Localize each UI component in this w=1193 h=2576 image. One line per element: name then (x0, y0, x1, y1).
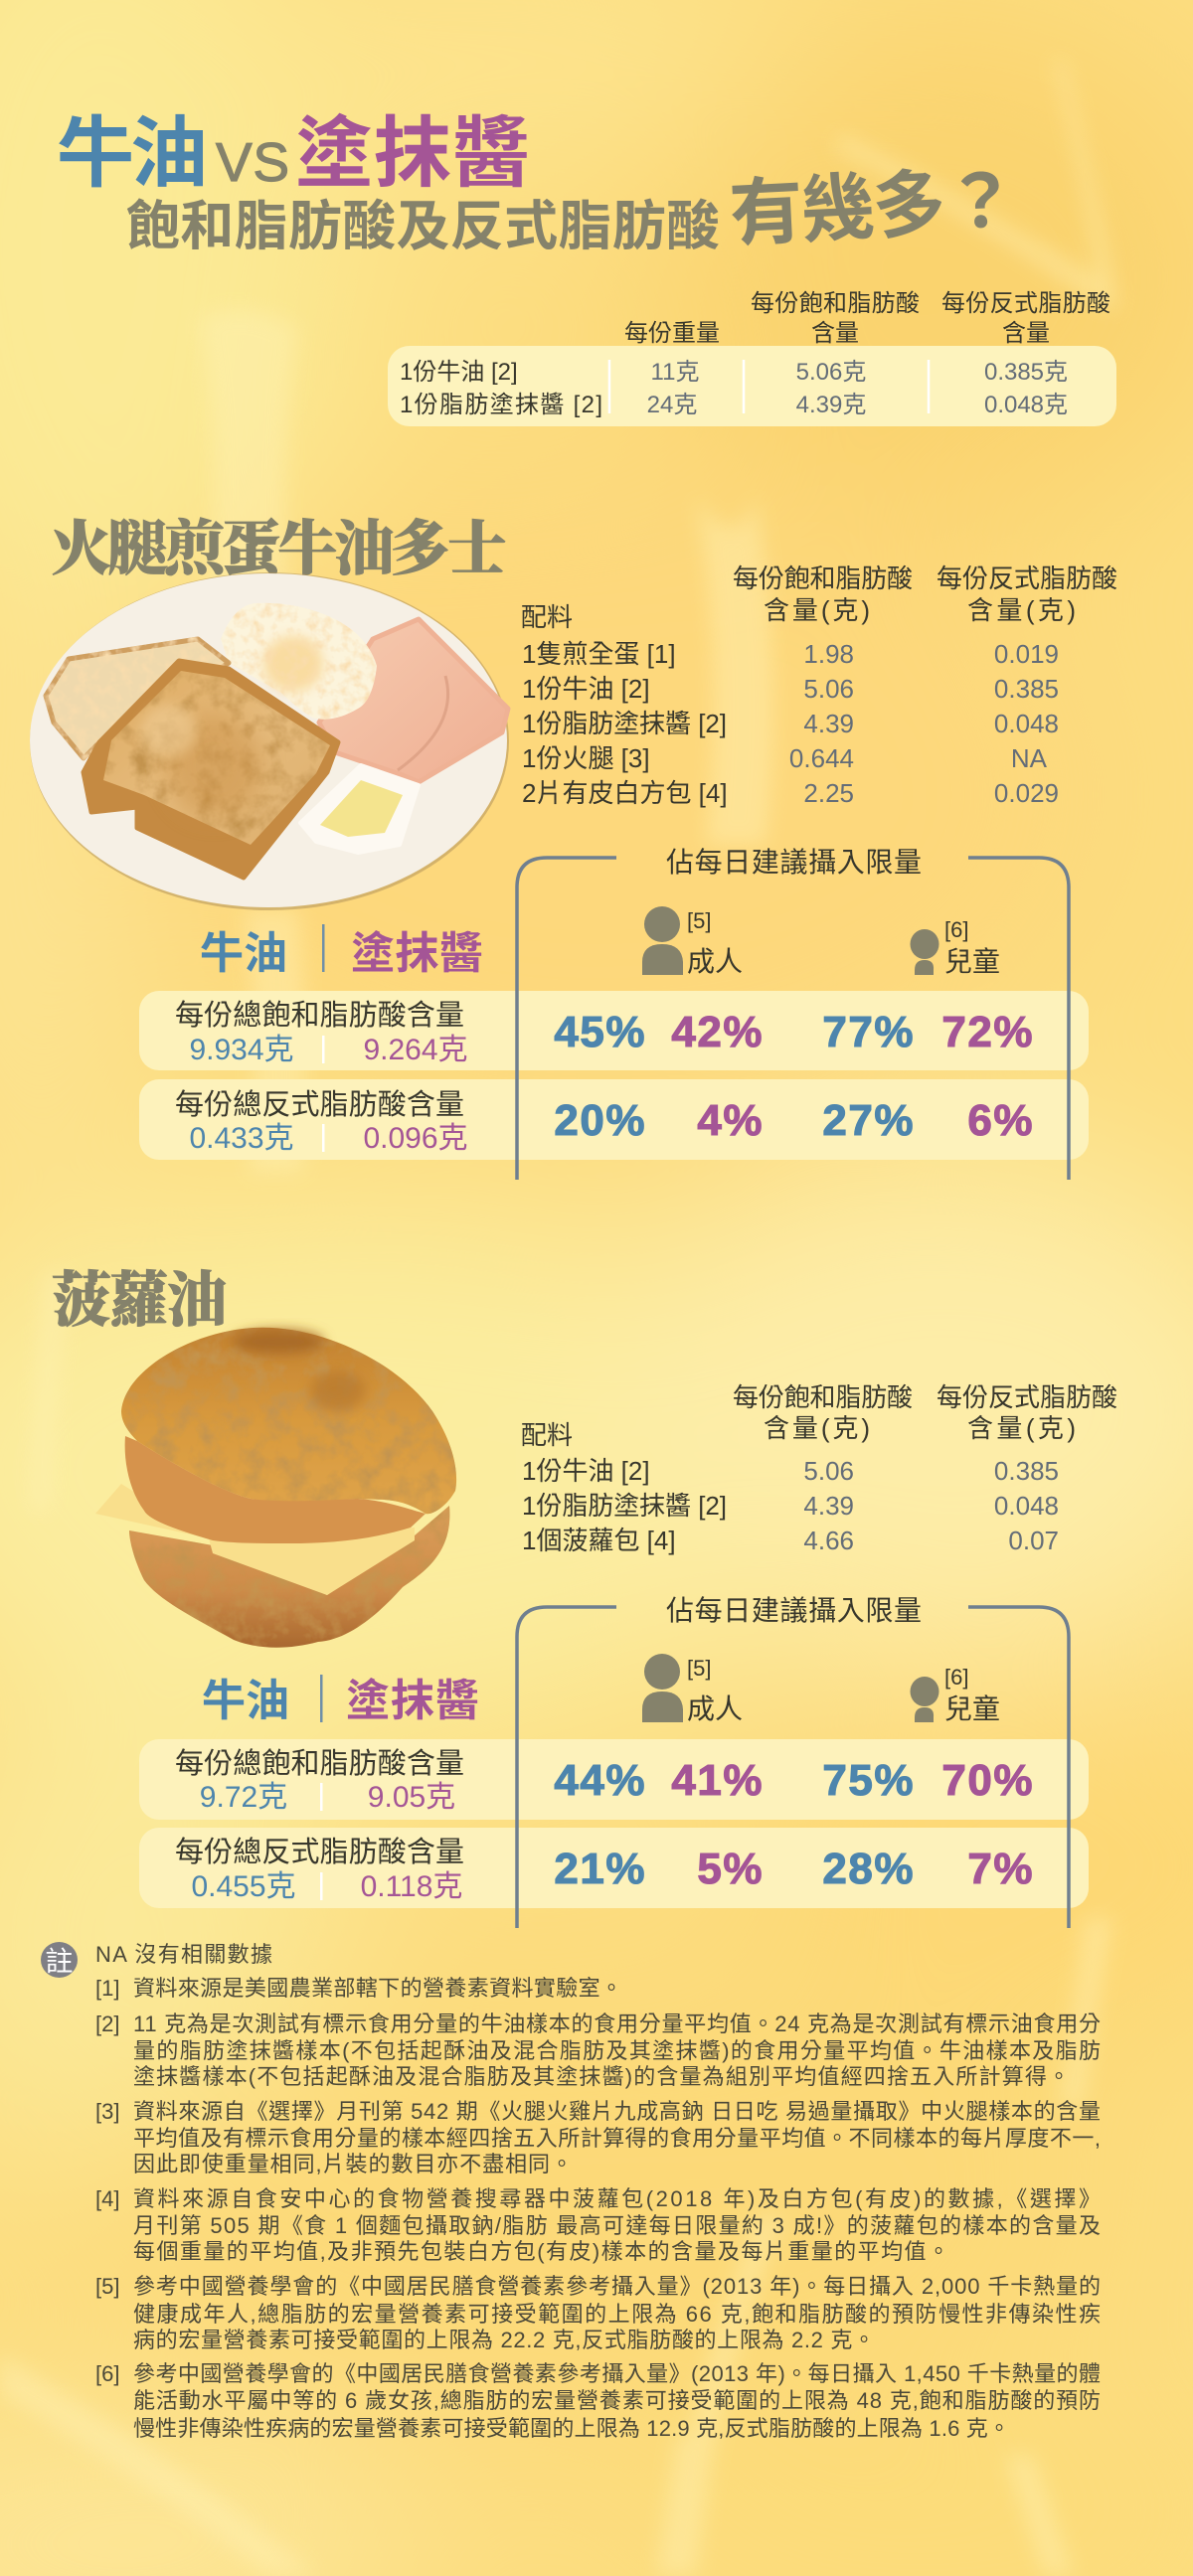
heading: ham and egg toast: 火腿煎蛋牛油多士 (52, 517, 507, 582)
title: VS (216, 131, 289, 193)
row: total saturated fat, toast: 42% (671, 1008, 764, 1056)
table: ingredients for ham and egg toast: 0.029 (994, 778, 1059, 808)
row: total saturated fat, toast: 9.934克 (189, 1034, 294, 1066)
notes: NA 沒有相關數據 (95, 1942, 272, 1967)
notes: 能活動水平屬中等的 6 歲女孩,總脂肪的宏量營養素可接受範圍的上限為 48 克,飽和脂肪酸的預防 (133, 2388, 1101, 2413)
table: ingredients for ham and egg toast: 含量(克) (967, 595, 1076, 625)
ham (319, 619, 508, 782)
row: total saturated fat, toast: 72% (941, 1008, 1034, 1056)
row: total saturated fat, toast: 9.264克 (363, 1034, 468, 1066)
table: ingredients for ham and egg toast: 1份牛油 [2] (522, 674, 650, 704)
icon: adult (642, 906, 743, 977)
notes: 資料來源自食安中心的食物營養搜尋器中菠蘿包(2018 年)及白方包(有皮)的數據,《選擇》 (133, 2186, 1101, 2211)
table: ingredients for ham and egg toast: 1份脂肪塗抹醬 [2] (522, 709, 727, 738)
notes: 塗抹醬樣本(不包括起酥油及混合脂肪及其塗抹醬)的含量為組別平均值經四捨五入所計算得。 (133, 2064, 1070, 2089)
table: serving weight and fat per serving: 每份反式脂肪酸 (941, 290, 1110, 317)
notes: 月刊第 505 期《食 1 個麵包攝取鈉/脂肪 最高可達每日限量約 3 成!》的菠蘿包的樣本的含量及 (133, 2213, 1101, 2238)
bracket: share of daily recommended intake: 佔每日建議攝入限量 (666, 1595, 922, 1626)
row: total saturated fat, bun: 44% (554, 1756, 646, 1805)
row: total trans fat, bun: 21% (554, 1845, 646, 1893)
icon: adult (642, 1654, 743, 1724)
table: ingredients for pineapple bun: 每份反式脂肪酸 (937, 1382, 1117, 1412)
notes (95, 1942, 1101, 2441)
table: ingredients for ham and egg toast: 2片有皮白方包 [4] (522, 778, 728, 808)
table: ingredients for pineapple bun: 配料 (521, 1420, 573, 1450)
bracket: share of daily recommended intake (517, 847, 1069, 1180)
row: total trans fat, bun: 0.118克 (361, 1870, 462, 1903)
table: ingredients for pineapple bun: 含量(克) (764, 1413, 870, 1443)
table: ingredients for pineapple bun: 1份脂肪塗抹醬 [2] (522, 1491, 727, 1521)
notes: 平均值及有標示食用分量的樣本經四捨五入所計算得的食用分量平均值。不同樣本的每片厚度不一, (133, 2126, 1101, 2151)
table: ingredients for pineapple bun: 1份牛油 [2] (522, 1456, 650, 1486)
food photo: pineapple bun (95, 1328, 456, 1648)
table: ingredients for pineapple bun: 4.39 (803, 1491, 854, 1521)
title: 飽和脂肪酸及反式脂肪酸 (126, 197, 720, 256)
notes: 資料來源是美國農業部轄下的營養素資料實驗室。 (133, 1976, 622, 2001)
table: ingredients for ham and egg toast: 1份火腿 [3] (522, 743, 650, 773)
butter dish (300, 765, 419, 853)
table: serving weight and fat per serving: 含量 (811, 320, 859, 347)
notes: [4] (95, 2186, 119, 2211)
table: ingredients for ham and egg toast: 0.019 (994, 639, 1059, 669)
notes: [1] (95, 1976, 119, 2001)
heading: pineapple bun with butter: 菠蘿油 (52, 1268, 227, 1334)
table: serving weight and fat per serving: 4.39克 (796, 392, 866, 418)
row: total trans fat, bun: 每份總反式脂肪酸含量 (175, 1836, 464, 1868)
table: ingredients for ham and egg toast: 每份反式脂肪酸 (937, 564, 1117, 593)
row: total saturated fat, toast: 每份總飽和脂肪酸含量 (175, 999, 464, 1032)
notes: 每個重量的平均值,及非預先包裝白方包(有皮)樣本的含量及每片重量的平均值。 (133, 2239, 949, 2264)
table: serving weight and fat per serving: 24克 (647, 392, 697, 418)
row: total trans fat, toast: 4% (697, 1096, 764, 1145)
title: 塗抹醬 (295, 109, 530, 197)
legend: butter vs spread: 塗抹醬 (346, 1677, 479, 1725)
table: ingredients for ham and egg toast: 5.06 (803, 674, 854, 704)
row: total trans fat, bun (175, 1836, 1034, 1903)
row: total trans fat, bun: 7% (967, 1845, 1034, 1893)
icon: child: 兒童 (944, 946, 1000, 977)
legend: butter vs spread (202, 1675, 479, 1725)
row: total trans fat, toast: 20% (554, 1096, 646, 1145)
notes: [5] (95, 2274, 119, 2299)
icon: child: 兒童 (944, 1693, 1000, 1724)
back toast (46, 639, 229, 758)
table: ingredients for pineapple bun: 0.048 (994, 1491, 1059, 1521)
row: total saturated fat, bun: 9.72克 (200, 1781, 287, 1814)
panel: comparison rows for toast (139, 991, 1089, 1160)
notes: 參考中國營養學會的《中國居民膳食營養素參考攝入量》(2013 年)。每日攝入 2,000 千卡熱量的 (133, 2274, 1101, 2299)
bracket: share of daily recommended intake: 佔每日建議攝入限量 (666, 847, 922, 878)
icon: child (911, 917, 1000, 977)
row: total trans fat, toast (175, 1088, 1034, 1155)
table: serving weight and fat per serving: 每份重量 (624, 320, 720, 347)
bracket: share of daily recommended intake (517, 1595, 1069, 1928)
icon: child: [6] (944, 917, 968, 942)
middle bread (125, 1436, 426, 1543)
icon: adult: [5] (687, 1656, 711, 1681)
table: ingredients for ham and egg toast: 1隻煎全蛋 [1] (522, 639, 676, 669)
legend: butter vs spread: 塗抹醬 (351, 929, 483, 978)
table: serving weight and fat per serving: 11克 (651, 359, 699, 386)
table: ingredients for pineapple bun: 0.385 (994, 1456, 1059, 1486)
notes: 參考中國營養學會的《中國居民膳食營養素參考攝入量》(2013 年)。每日攝入 1,450 千卡熱量的體 (133, 2361, 1101, 2386)
row: total trans fat, toast: 0.433克 (189, 1122, 294, 1155)
table: ingredients for ham and egg toast: 含量(克) (764, 595, 870, 625)
row: total trans fat, toast: 6% (967, 1096, 1034, 1145)
table: ingredients for ham and egg toast: 0.644 (789, 743, 854, 773)
table: ingredients for ham and egg toast (521, 564, 1117, 808)
notes: 資料來源自《選擇》月刊第 542 期《火腿火雞片九成高鈉 日日吃 易過量攝取》中火腿樣本的含量 (133, 2099, 1101, 2124)
front toast (84, 661, 338, 878)
table: serving weight and fat per serving: 0.385克 (984, 359, 1068, 386)
table: serving weight and fat per serving: 0.048克 (984, 392, 1068, 418)
food photo: plate with toast, egg, ham and butter (30, 572, 509, 910)
table: ingredients for pineapple bun: 4.66 (803, 1526, 854, 1555)
table: ingredients for pineapple bun: 1個菠蘿包 [4] (522, 1526, 676, 1555)
icon: child: [6] (944, 1665, 968, 1690)
table: ingredients for ham and egg toast: 0.048 (994, 709, 1059, 738)
row: total trans fat, bun: 5% (697, 1845, 764, 1893)
table: ingredients for pineapple bun: 5.06 (803, 1456, 854, 1486)
row: total trans fat, bun: 28% (822, 1845, 915, 1893)
notes: 量的脂肪塗抹醬樣本(不包括起酥油及混合脂肪及其塗抹醬)的食用分量平均值。牛油樣本及脂肪 (133, 2038, 1101, 2063)
table: ingredients for pineapple bun: 每份飽和脂肪酸 (733, 1382, 913, 1412)
table: serving weight and fat per serving (388, 290, 1116, 426)
table: ingredients for ham and egg toast: 每份飽和脂肪酸 (733, 564, 913, 593)
row: total saturated fat, bun: 70% (941, 1756, 1034, 1805)
row: total saturated fat, bun: 75% (822, 1756, 915, 1805)
row: total saturated fat, toast (175, 999, 1034, 1066)
notes: 因此即使重量相同,片裝的數目亦不盡相同。 (133, 2152, 573, 2176)
table: serving weight and fat per serving: 含量 (1002, 320, 1050, 347)
table: serving weight and fat per serving: 1份脂肪塗抹醬 [2] (400, 392, 602, 418)
legend: butter vs spread: 牛油 (200, 929, 287, 978)
table: serving weight and fat per serving: 每份飽和脂肪酸 (751, 290, 920, 317)
table: ingredients for ham and egg toast: 0.385 (994, 674, 1059, 704)
table: ingredients for pineapple bun (521, 1382, 1117, 1555)
icon: notes badge (41, 1942, 78, 1978)
notes: 慢性非傳染性疾病的宏量營養素可接受範圍的上限為 12.9 克,反式脂肪酸的上限為 1.6 克。 (133, 2416, 1010, 2441)
row: total trans fat, bun: 0.455克 (191, 1870, 296, 1903)
row: total saturated fat, bun: 9.05克 (368, 1781, 455, 1814)
notes: 健康成年人,總脂肪的宏量營養素可接受範圍的上限為 66 克,飽和脂肪酸的預防慢性非傳染性疾 (133, 2302, 1101, 2327)
title: 有幾多？ (728, 159, 1019, 255)
row: total saturated fat, toast: 77% (822, 1008, 915, 1056)
table: ingredients for ham and egg toast: 1.98 (803, 639, 854, 669)
icon: adult: [5] (687, 908, 711, 933)
legend: butter vs spread (200, 924, 483, 978)
table row background (388, 346, 1116, 426)
icon: child (911, 1665, 1000, 1724)
notes: [6] (95, 2361, 119, 2386)
crust (121, 1328, 456, 1514)
icon: notes badge: 註 (45, 1946, 74, 1977)
notes: [2] (95, 2012, 119, 2036)
row: total saturated fat, bun: 41% (671, 1756, 764, 1805)
row: total trans fat, toast: 27% (822, 1096, 915, 1145)
notes: 11 克為是次測試有標示食用分量的牛油樣本的食用分量平均值。24 克為是次測試有標示油食用分 (133, 2012, 1101, 2036)
table: ingredients for ham and egg toast: 2.25 (803, 778, 854, 808)
row: total saturated fat, bun (175, 1747, 1034, 1814)
legend: butter vs spread: 牛油 (202, 1677, 289, 1725)
row: total trans fat, toast: 每份總反式脂肪酸含量 (175, 1088, 464, 1121)
row: total saturated fat, bun: 每份總飽和脂肪酸含量 (175, 1747, 464, 1780)
panel: comparison rows for pineapple bun (139, 1739, 1089, 1908)
title (57, 109, 1019, 256)
table: serving weight and fat per serving: 5.06克 (796, 359, 866, 386)
table: serving weight and fat per serving: 1份牛油 [2] (400, 359, 518, 386)
fried egg (221, 603, 377, 720)
row: total saturated fat, toast: 45% (554, 1008, 646, 1056)
table: ingredients for ham and egg toast: 4.39 (803, 709, 854, 738)
table: ingredients for pineapple bun: 含量(克) (967, 1413, 1076, 1443)
title: 牛油 (57, 109, 208, 197)
notes: 病的宏量營養素可接受範圍的上限為 22.2 克,反式脂肪酸的上限為 2.2 克。 (133, 2328, 875, 2352)
notes: [3] (95, 2099, 119, 2124)
bottom bread (129, 1506, 449, 1648)
table: ingredients for pineapple bun: 0.07 (1008, 1526, 1059, 1555)
icon: adult: 成人 (687, 946, 743, 977)
row: total trans fat, toast: 0.096克 (363, 1122, 468, 1155)
table: ingredients for ham and egg toast: NA (1011, 743, 1048, 773)
butter slice (95, 1484, 415, 1595)
table: ingredients for ham and egg toast: 配料 (521, 602, 573, 632)
icon: adult: 成人 (687, 1693, 743, 1724)
